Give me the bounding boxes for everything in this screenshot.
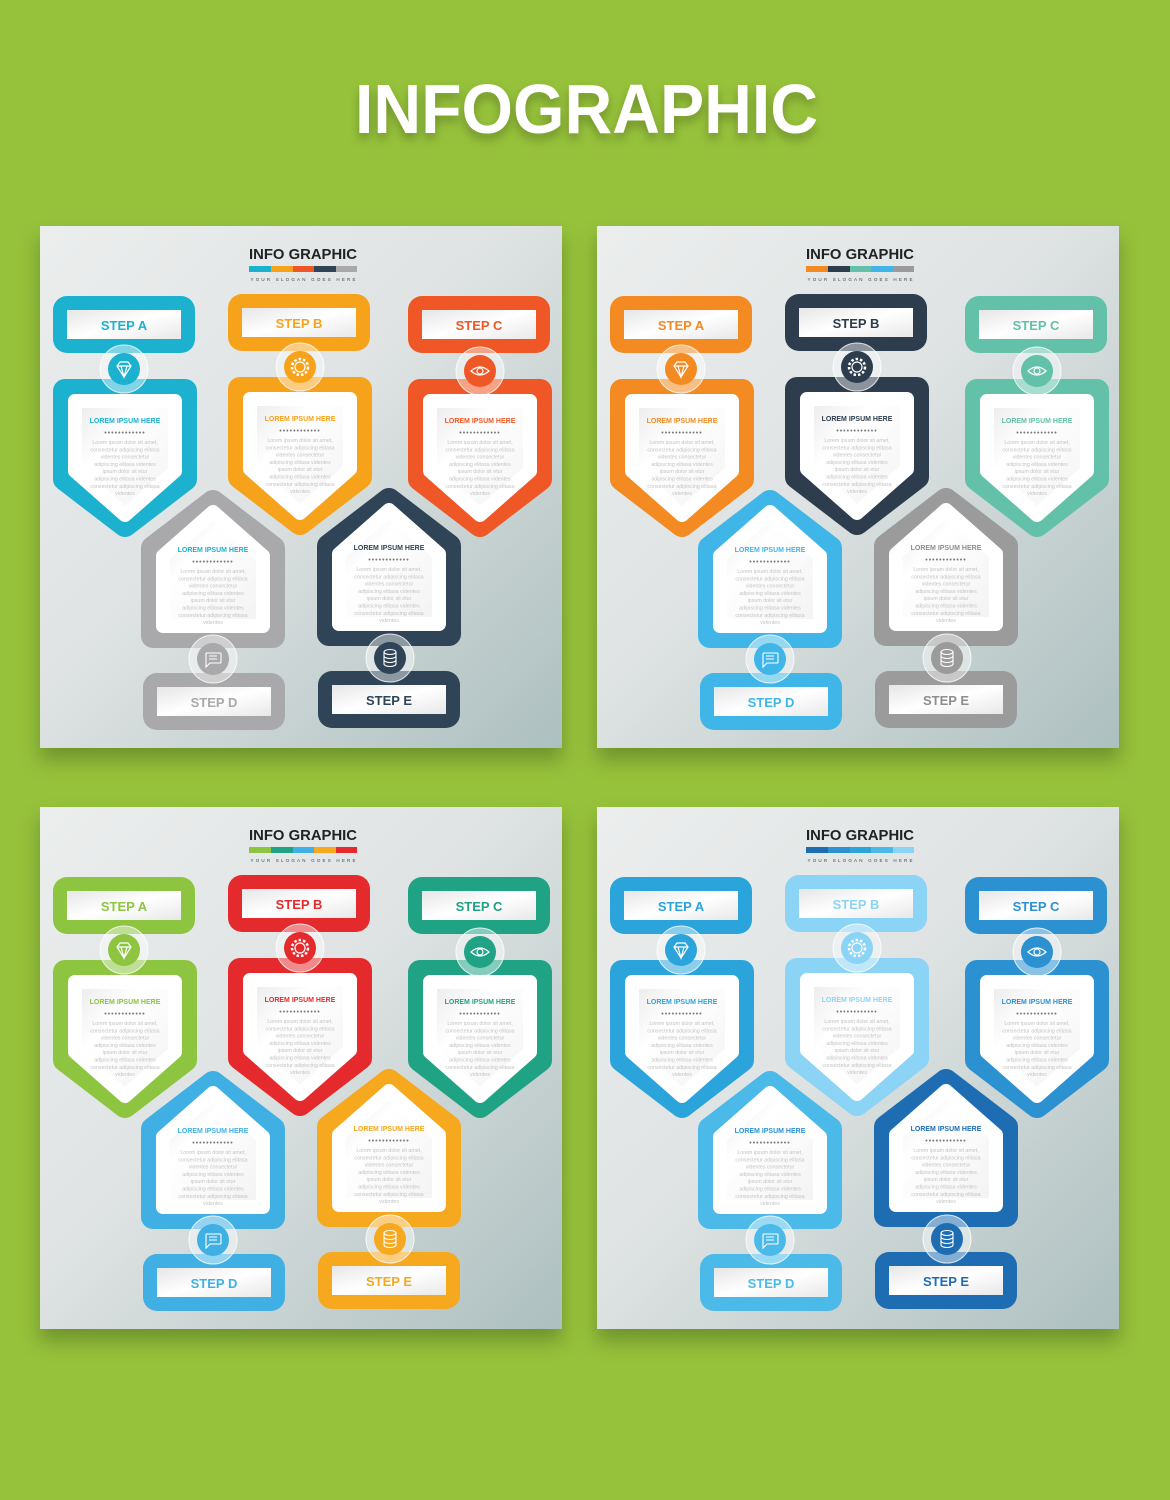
step C: consectetur adipiscing elitasa [1002, 1028, 1072, 1034]
step A: videntes consectetur [658, 455, 707, 461]
icon: eye [1013, 347, 1061, 395]
step B: videntes consectetur [833, 1034, 882, 1040]
step B: adipiscing elitasa videntes [269, 474, 331, 480]
step D: videntes consectetur [746, 1165, 795, 1171]
step D: STEP D [191, 1276, 237, 1291]
icon: gear [833, 343, 881, 391]
step D: videntes consectetur [189, 584, 238, 590]
icon: gear [276, 343, 324, 391]
step C: videntes [470, 491, 490, 497]
step D: LOREM IPSUM HERE [178, 1128, 249, 1135]
step C: videntes [470, 1072, 490, 1078]
step A: Lorem ipsum dolor sit amet, [649, 440, 715, 446]
step B: consectetur adipiscing elitasa [265, 445, 335, 451]
step C: consectetur adipiscing elitasa [445, 1065, 515, 1071]
step E: LOREM IPSUM HERE [354, 545, 425, 552]
step E: adipiscing elitasa videntes [358, 1170, 420, 1176]
step E: videntes [379, 618, 399, 624]
step D: •••••••••••• [192, 1140, 234, 1147]
step B: ipsum dolor sit etur [835, 1048, 880, 1054]
step A: Lorem ipsum dolor sit amet, [649, 1021, 715, 1027]
step E: LOREM IPSUM HERE [354, 1126, 425, 1133]
step C: consectetur adipiscing elitasa [445, 1028, 515, 1034]
step B: adipiscing elitasa videntes [826, 474, 888, 480]
step A: consectetur adipiscing elitasa [90, 447, 160, 453]
step E: ipsum dolor sit etur [367, 596, 412, 602]
step D: ipsum dolor sit etur [191, 1179, 236, 1185]
step D: STEP D [748, 695, 794, 710]
step E: videntes [936, 618, 956, 624]
step A: adipiscing elitasa videntes [94, 476, 156, 482]
step C: videntes consectetur [1013, 455, 1062, 461]
step C: LOREM IPSUM HERE [1002, 418, 1073, 425]
step E: Lorem ipsum dolor sit amet, [913, 567, 979, 573]
icon: chat [189, 1216, 237, 1264]
step C: consectetur adipiscing elitasa [1002, 484, 1072, 490]
step B: adipiscing elitasa videntes [826, 1056, 888, 1062]
step A: adipiscing elitasa videntes [651, 476, 713, 482]
step B: ipsum dolor sit etur [835, 467, 880, 473]
step B: consectetur adipiscing elitasa [265, 1063, 335, 1069]
panel heading: INFO GRAPHIC [806, 246, 914, 263]
step C: consectetur adipiscing elitasa [1002, 1065, 1072, 1071]
icon: chat [189, 635, 237, 683]
step D: consectetur adipiscing elitasa [735, 576, 805, 582]
step B [228, 294, 370, 523]
step B: videntes [290, 489, 310, 495]
step A: consectetur adipiscing elitasa [647, 484, 717, 490]
step D: adipiscing elitasa videntes [182, 606, 244, 612]
step E: adipiscing elitasa videntes [915, 589, 977, 595]
icon: coins [366, 1215, 414, 1263]
step A [610, 877, 752, 1106]
step A: LOREM IPSUM HERE [647, 418, 718, 425]
step E: Lorem ipsum dolor sit amet, [356, 567, 422, 573]
step E: adipiscing elitasa videntes [358, 589, 420, 595]
step B: LOREM IPSUM HERE [265, 997, 336, 1004]
panel heading: INFO GRAPHIC [249, 246, 357, 263]
step A: consectetur adipiscing elitasa [90, 1065, 160, 1071]
panel heading [806, 246, 914, 282]
step A: consectetur adipiscing elitasa [647, 1065, 717, 1071]
icon: gear [833, 924, 881, 972]
step D: adipiscing elitasa videntes [182, 591, 244, 597]
step B: consectetur adipiscing elitasa [822, 445, 892, 451]
step D: consectetur adipiscing elitasa [178, 1194, 248, 1200]
step C: ipsum dolor sit etur [1015, 1050, 1060, 1056]
step E: STEP E [923, 1274, 969, 1289]
step D: adipiscing elitasa videntes [739, 1186, 801, 1192]
step B: consectetur adipiscing elitasa [822, 482, 892, 488]
step D: Lorem ipsum dolor sit amet, [180, 1150, 246, 1156]
step D [700, 1083, 842, 1311]
icon: diamond [657, 345, 705, 393]
step B: consectetur adipiscing elitasa [265, 1026, 335, 1032]
step C: •••••••••••• [459, 1011, 501, 1018]
step A: adipiscing elitasa videntes [94, 1043, 156, 1049]
step A: videntes [115, 491, 135, 497]
step B: ipsum dolor sit etur [278, 1048, 323, 1054]
step D: ipsum dolor sit etur [191, 598, 236, 604]
step C: consectetur adipiscing elitasa [445, 447, 515, 453]
step C: Lorem ipsum dolor sit amet, [1004, 440, 1070, 446]
step C: videntes consectetur [456, 1036, 505, 1042]
icon: coins [366, 634, 414, 682]
step B: Lorem ipsum dolor sit amet, [267, 438, 333, 444]
step B: LOREM IPSUM HERE [822, 416, 893, 423]
step E: videntes consectetur [365, 1163, 414, 1169]
step A: LOREM IPSUM HERE [90, 999, 161, 1006]
step A: LOREM IPSUM HERE [90, 418, 161, 425]
step E: •••••••••••• [368, 1138, 410, 1145]
icon: diamond [100, 345, 148, 393]
step D: Lorem ipsum dolor sit amet, [180, 569, 246, 575]
step E [318, 500, 460, 728]
step E: ipsum dolor sit etur [924, 1177, 969, 1183]
step E: •••••••••••• [925, 1138, 967, 1145]
step D: •••••••••••• [749, 1140, 791, 1147]
step B: videntes consectetur [833, 453, 882, 459]
step C: •••••••••••• [459, 430, 501, 437]
panel heading [806, 827, 914, 863]
step D: videntes [203, 620, 223, 626]
step C: adipiscing elitasa videntes [449, 476, 511, 482]
step E: adipiscing elitasa videntes [915, 604, 977, 610]
step B: adipiscing elitasa videntes [269, 460, 331, 466]
step E: STEP E [366, 693, 412, 708]
step D: LOREM IPSUM HERE [735, 547, 806, 554]
step E: consectetur adipiscing elitasa [354, 1155, 424, 1161]
step E: LOREM IPSUM HERE [911, 1126, 982, 1133]
icon: chat [746, 1216, 794, 1264]
step B: consectetur adipiscing elitasa [822, 1026, 892, 1032]
step C: LOREM IPSUM HERE [1002, 999, 1073, 1006]
step D [143, 1083, 285, 1311]
step E: •••••••••••• [368, 557, 410, 564]
panel: infographic 4 [597, 807, 1119, 1329]
icon: chat [746, 635, 794, 683]
step E: STEP E [923, 693, 969, 708]
step A: LOREM IPSUM HERE [647, 999, 718, 1006]
step B: videntes [847, 1070, 867, 1076]
step B: Lorem ipsum dolor sit amet, [824, 1019, 890, 1025]
step D: consectetur adipiscing elitasa [178, 576, 248, 582]
step A: STEP A [101, 318, 148, 333]
step B: •••••••••••• [279, 1009, 321, 1016]
step D: LOREM IPSUM HERE [735, 1128, 806, 1135]
step B: adipiscing elitasa videntes [826, 1041, 888, 1047]
step B: •••••••••••• [279, 428, 321, 435]
panel heading: YOUR SLOGAN GOES HERE [808, 277, 912, 282]
step E: LOREM IPSUM HERE [911, 545, 982, 552]
step A: ipsum dolor sit etur [103, 469, 148, 475]
step B: STEP B [276, 316, 322, 331]
step D: ipsum dolor sit etur [748, 598, 793, 604]
step A: consectetur adipiscing elitasa [647, 447, 717, 453]
step D: adipiscing elitasa videntes [182, 1172, 244, 1178]
panel: infographic 1 [40, 226, 562, 748]
step D: STEP D [748, 1276, 794, 1291]
step C: adipiscing elitasa videntes [1006, 476, 1068, 482]
step B: Lorem ipsum dolor sit amet, [267, 1019, 333, 1025]
step C: adipiscing elitasa videntes [449, 462, 511, 468]
step C: STEP C [456, 318, 503, 333]
step A: adipiscing elitasa videntes [94, 462, 156, 468]
step A: consectetur adipiscing elitasa [90, 484, 160, 490]
step E: adipiscing elitasa videntes [915, 1170, 977, 1176]
step D: consectetur adipiscing elitasa [178, 1157, 248, 1163]
step C: consectetur adipiscing elitasa [445, 484, 515, 490]
step A: adipiscing elitasa videntes [94, 1058, 156, 1064]
step C: Lorem ipsum dolor sit amet, [447, 440, 513, 446]
step E: Lorem ipsum dolor sit amet, [913, 1148, 979, 1154]
step A: •••••••••••• [104, 1011, 146, 1018]
step B: STEP B [833, 897, 879, 912]
step E [875, 1081, 1017, 1309]
step D: videntes consectetur [189, 1165, 238, 1171]
step A: adipiscing elitasa videntes [651, 1058, 713, 1064]
step E: consectetur adipiscing elitasa [354, 1192, 424, 1198]
title: INFOGRAPHIC [355, 70, 818, 148]
step A: consectetur adipiscing elitasa [90, 1028, 160, 1034]
icon: eye [1013, 928, 1061, 976]
icon: diamond [100, 926, 148, 974]
step B: videntes [847, 489, 867, 495]
step C: videntes consectetur [456, 455, 505, 461]
step C: Lorem ipsum dolor sit amet, [447, 1021, 513, 1027]
step B: consectetur adipiscing elitasa [265, 482, 335, 488]
step B: LOREM IPSUM HERE [265, 416, 336, 423]
step E [318, 1081, 460, 1309]
step C: ipsum dolor sit etur [458, 1050, 503, 1056]
icon: coins [923, 634, 971, 682]
step D: adipiscing elitasa videntes [739, 591, 801, 597]
step C: consectetur adipiscing elitasa [1002, 447, 1072, 453]
step B: adipiscing elitasa videntes [269, 1056, 331, 1062]
panel: infographic 2 [597, 226, 1119, 748]
step D: consectetur adipiscing elitasa [178, 613, 248, 619]
icon: coins [923, 1215, 971, 1263]
step A: ipsum dolor sit etur [660, 469, 705, 475]
step B: •••••••••••• [836, 1009, 878, 1016]
step C: videntes [1027, 491, 1047, 497]
step E: consectetur adipiscing elitasa [911, 574, 981, 580]
step C [408, 877, 550, 1106]
step E: consectetur adipiscing elitasa [911, 1155, 981, 1161]
step C: STEP C [456, 899, 503, 914]
step A: videntes consectetur [101, 455, 150, 461]
step A: consectetur adipiscing elitasa [647, 1028, 717, 1034]
step B [785, 875, 927, 1104]
step A: adipiscing elitasa videntes [651, 1043, 713, 1049]
step D: adipiscing elitasa videntes [739, 1172, 801, 1178]
step D: videntes [760, 1201, 780, 1207]
step C: adipiscing elitasa videntes [1006, 1043, 1068, 1049]
step D: •••••••••••• [192, 559, 234, 566]
step E: adipiscing elitasa videntes [915, 1184, 977, 1190]
step A [610, 296, 752, 525]
step A: videntes [672, 491, 692, 497]
step B: Lorem ipsum dolor sit amet, [824, 438, 890, 444]
step C: Lorem ipsum dolor sit amet, [1004, 1021, 1070, 1027]
step A: Lorem ipsum dolor sit amet, [92, 1021, 158, 1027]
step E: videntes consectetur [922, 1163, 971, 1169]
step D: LOREM IPSUM HERE [178, 547, 249, 554]
step A [53, 296, 195, 525]
step B: •••••••••••• [836, 428, 878, 435]
step D: videntes consectetur [746, 584, 795, 590]
step C: videntes consectetur [1013, 1036, 1062, 1042]
panel heading: YOUR SLOGAN GOES HERE [250, 277, 356, 282]
step B: videntes consectetur [276, 1034, 325, 1040]
step E [875, 500, 1017, 728]
step D: adipiscing elitasa videntes [182, 1186, 244, 1192]
step A: videntes consectetur [101, 1036, 150, 1042]
step A: •••••••••••• [661, 430, 703, 437]
step D: Lorem ipsum dolor sit amet, [737, 569, 803, 575]
step E: consectetur adipiscing elitasa [354, 611, 424, 617]
step E: videntes [936, 1199, 956, 1205]
step D [143, 502, 285, 730]
step C: ipsum dolor sit etur [1015, 469, 1060, 475]
step A: adipiscing elitasa videntes [651, 462, 713, 468]
step C: STEP C [1013, 899, 1060, 914]
panel heading: INFO GRAPHIC [249, 827, 357, 844]
step B: adipiscing elitasa videntes [826, 460, 888, 466]
panel heading [249, 827, 357, 863]
icon: gear [276, 924, 324, 972]
icon: diamond [657, 926, 705, 974]
step A: STEP A [658, 318, 705, 333]
step E: Lorem ipsum dolor sit amet, [356, 1148, 422, 1154]
icon: eye [456, 347, 504, 395]
step C: adipiscing elitasa videntes [1006, 1058, 1068, 1064]
step E: consectetur adipiscing elitasa [911, 611, 981, 617]
step C: ipsum dolor sit etur [458, 469, 503, 475]
step D: consectetur adipiscing elitasa [735, 613, 805, 619]
panel heading: INFO GRAPHIC [806, 827, 914, 844]
step D: STEP D [191, 695, 237, 710]
step C [965, 296, 1107, 525]
step E: consectetur adipiscing elitasa [911, 1192, 981, 1198]
step D: videntes [203, 1201, 223, 1207]
step B [228, 875, 370, 1104]
step E: videntes consectetur [922, 582, 971, 588]
step D: videntes [760, 620, 780, 626]
step E: STEP E [366, 1274, 412, 1289]
step A: •••••••••••• [104, 430, 146, 437]
step B [785, 294, 927, 523]
step E: •••••••••••• [925, 557, 967, 564]
step C: videntes [1027, 1072, 1047, 1078]
step A: Lorem ipsum dolor sit amet, [92, 440, 158, 446]
step C: STEP C [1013, 318, 1060, 333]
step E: adipiscing elitasa videntes [358, 1184, 420, 1190]
step C: adipiscing elitasa videntes [1006, 462, 1068, 468]
step B: videntes consectetur [276, 453, 325, 459]
step B: videntes [290, 1070, 310, 1076]
step C: adipiscing elitasa videntes [449, 1043, 511, 1049]
step A: ipsum dolor sit etur [103, 1050, 148, 1056]
step D: ipsum dolor sit etur [748, 1179, 793, 1185]
step C [408, 296, 550, 525]
step A: ipsum dolor sit etur [660, 1050, 705, 1056]
panel heading [249, 246, 357, 282]
step E: adipiscing elitasa videntes [358, 604, 420, 610]
step A [53, 877, 195, 1106]
step B: adipiscing elitasa videntes [269, 1041, 331, 1047]
step C: •••••••••••• [1016, 1011, 1058, 1018]
step A: STEP A [101, 899, 148, 914]
step D: consectetur adipiscing elitasa [735, 1194, 805, 1200]
step C: LOREM IPSUM HERE [445, 418, 516, 425]
panel: infographic 3 [40, 807, 562, 1329]
step B: STEP B [276, 897, 322, 912]
step E: ipsum dolor sit etur [367, 1177, 412, 1183]
step C: LOREM IPSUM HERE [445, 999, 516, 1006]
step A: STEP A [658, 899, 705, 914]
step C [965, 877, 1107, 1106]
step E: videntes consectetur [365, 582, 414, 588]
step B: LOREM IPSUM HERE [822, 997, 893, 1004]
step A: •••••••••••• [661, 1011, 703, 1018]
step D [700, 502, 842, 730]
step B: ipsum dolor sit etur [278, 467, 323, 473]
step D: adipiscing elitasa videntes [739, 606, 801, 612]
icon: eye [456, 928, 504, 976]
panel heading: YOUR SLOGAN GOES HERE [808, 858, 912, 863]
step B: consectetur adipiscing elitasa [822, 1063, 892, 1069]
step A: videntes [672, 1072, 692, 1078]
step B: STEP B [833, 316, 879, 331]
step D: consectetur adipiscing elitasa [735, 1157, 805, 1163]
step E: ipsum dolor sit etur [924, 596, 969, 602]
step C: •••••••••••• [1016, 430, 1058, 437]
step D: •••••••••••• [749, 559, 791, 566]
step E: videntes [379, 1199, 399, 1205]
step A: videntes [115, 1072, 135, 1078]
step C: adipiscing elitasa videntes [449, 1058, 511, 1064]
step E: consectetur adipiscing elitasa [354, 574, 424, 580]
step D: Lorem ipsum dolor sit amet, [737, 1150, 803, 1156]
step A: videntes consectetur [658, 1036, 707, 1042]
panel heading: YOUR SLOGAN GOES HERE [250, 858, 356, 863]
